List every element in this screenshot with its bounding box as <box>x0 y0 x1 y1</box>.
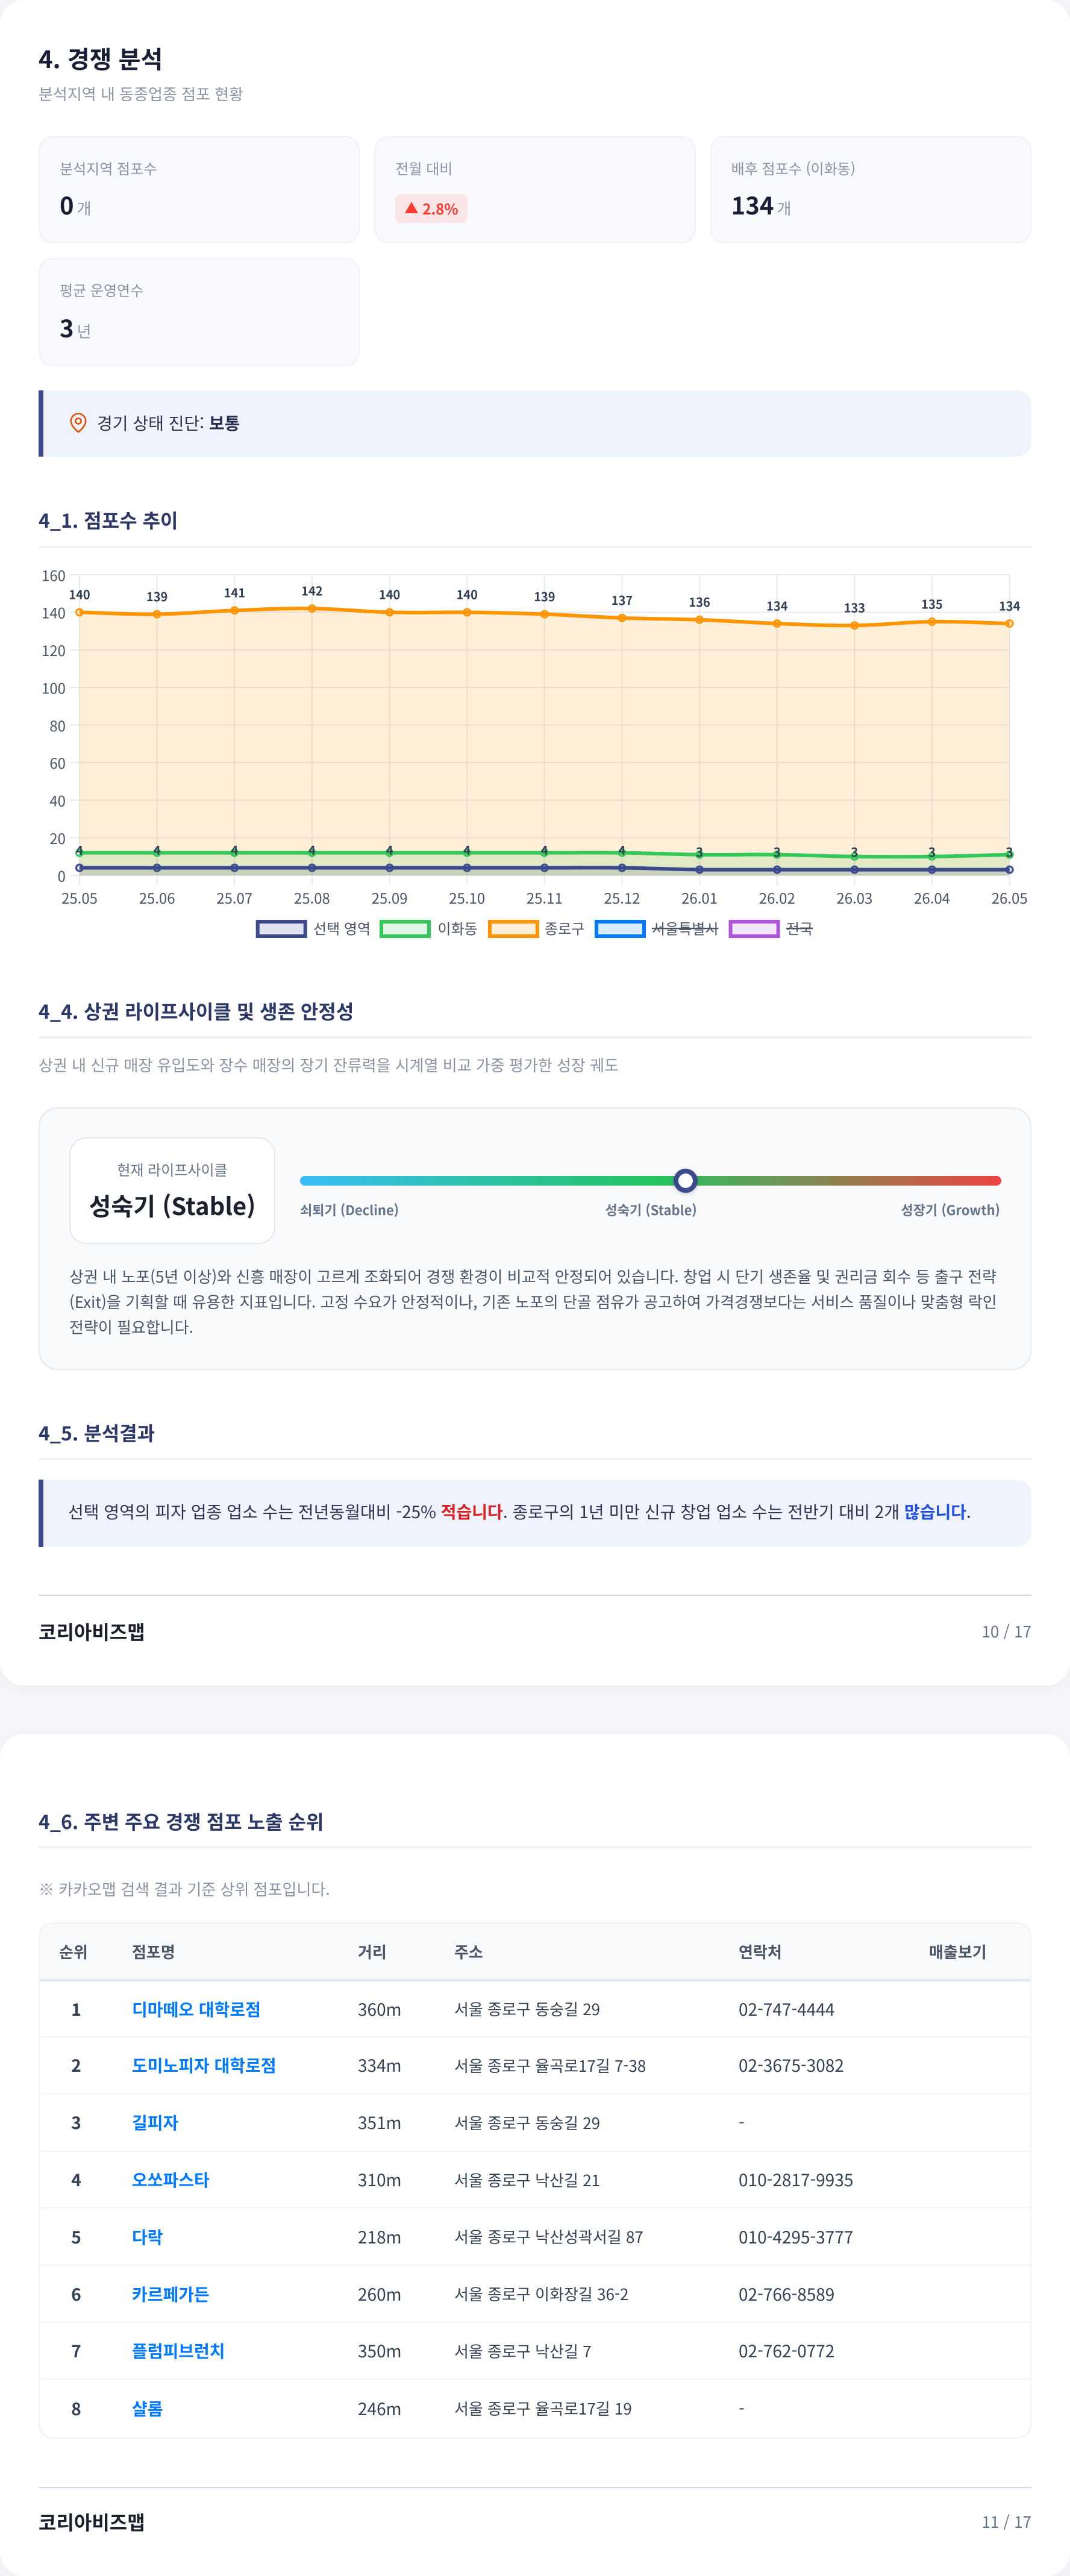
callout: 경기 상태 진단 <box>39 390 1031 457</box>
data labels: 종로구: 134 <box>766 596 788 614</box>
heading: 4_4: 4_4. 상권 라이프사이클 및 생존 안정성 <box>39 997 354 1025</box>
x axis labels: 26.05 <box>992 887 1028 908</box>
line chart: 점포수 추이 <box>42 564 1028 939</box>
table: competitors: 351m <box>358 2110 402 2134</box>
icon: map pin <box>70 413 87 433</box>
stat card: 배후 점포수: 134개 <box>731 187 791 222</box>
legend: 서울특별시 <box>652 917 718 939</box>
y axis labels: 60 <box>49 752 66 773</box>
table: competitors: - <box>739 2396 745 2421</box>
data labels: 종로구: 141 <box>224 584 245 601</box>
page number: 11 / 17 <box>982 2510 1031 2533</box>
footer brand: 코리아비즈맵 <box>39 1618 145 1645</box>
table: competitors: 다락 <box>132 2224 163 2248</box>
table: competitors: 길피자 <box>132 2110 178 2134</box>
data labels: 선택 영역: 4 <box>541 841 548 858</box>
y axis labels: 140 <box>42 602 66 623</box>
callout: analysis result: 선택 영역의 피자 업종 업소 수는 전년동월대비 -25% 적습니다. 종로구의 1년 미만 신규 창업 업소 수는 전반기 대비 2개 많습니다. <box>68 1499 971 1524</box>
table: competitors: 서울 종로구 낙산길 21 <box>454 2169 600 2190</box>
table: competitors: 서울 종로구 낙산길 7 <box>454 2340 592 2362</box>
heading: 4_5: 4_5. 분석결과 <box>39 1419 155 1446</box>
table: competitors: 3 <box>71 2110 81 2134</box>
data labels: 종로구: 139 <box>534 587 555 605</box>
legend <box>258 917 813 939</box>
table: competitors: 서울 종로구 율곡로17길 7-38 <box>454 2054 646 2076</box>
table: competitors: 서울 종로구 동숭길 29 <box>454 1998 600 2020</box>
description: 4_4: 상권 내 신규 매장 유입도와 장수 매장의 장기 잔류력을 시계열 비교 가중 평가한 성장 궤도 <box>39 1054 619 1076</box>
table: competitors: 360m <box>358 1996 402 2021</box>
table: competitors: 점포명 <box>132 1940 175 1963</box>
data labels: 종로구: 140 <box>379 586 400 603</box>
x axis labels: 25.07 <box>216 887 252 908</box>
table: competitors: 218m <box>358 2224 402 2248</box>
description paragraph <box>69 1265 997 1338</box>
table: competitors: 6 <box>71 2282 81 2306</box>
data labels: 선택 영역: 4 <box>463 841 471 858</box>
callout: analysis result <box>39 1480 1031 1547</box>
scale label: stable: 성숙기 (Stable) <box>605 1200 697 1219</box>
table: competitors: 서울 종로구 이화장길 36-2 <box>454 2283 628 2305</box>
data labels: 종로구: 142 <box>301 581 323 599</box>
x axis labels: 25.06 <box>139 887 175 908</box>
table: competitors: 2 <box>71 2053 81 2077</box>
legend: 종로구 <box>545 917 584 939</box>
table: competitors: 플럼피브런치 <box>132 2339 225 2363</box>
y axis labels: 160 <box>42 564 66 585</box>
current stage card <box>69 1137 275 1244</box>
diagnosis text: 경기 상태 진단: 보통 <box>97 411 240 435</box>
table: competitors: 350m <box>358 2339 402 2363</box>
x axis labels <box>61 887 1028 908</box>
data labels: 선택 영역: 4 <box>386 841 393 858</box>
x axis labels: 26.02 <box>759 887 795 908</box>
heading: 4_1: 4_1. 점포수 추이 <box>39 506 178 534</box>
stat card: 평균 운영연수: 평균 운영연수 <box>60 279 143 300</box>
y axis labels: 40 <box>49 790 66 811</box>
table: competitors: 4 <box>71 2168 81 2192</box>
legend: 선택 영역 <box>313 917 371 939</box>
table: competitors: 02-762-0772 <box>739 2339 834 2363</box>
series: 이화동 <box>76 849 1013 875</box>
legend: 전국 <box>786 917 813 939</box>
x axis labels: 25.12 <box>604 887 640 908</box>
table: competitors: 순위 <box>59 1940 88 1963</box>
subtitle: 분석지역 내 동종업종 점포 현황 <box>39 83 243 105</box>
note: ※ 카카오맵 검색 결과 기준 상위 점포입니다. <box>39 1878 330 1900</box>
x axis labels: 26.03 <box>836 887 872 908</box>
table: competitors: 서울 종로구 낙산성곽서길 87 <box>454 2225 643 2248</box>
data labels: 종로구: 135 <box>921 595 943 612</box>
data labels: 선택 영역 <box>76 841 1013 860</box>
stat card: 평균 운영연수: 3년 <box>60 310 92 345</box>
data labels: 선택 영역: 4 <box>231 841 238 858</box>
table: competitors: 오쏘파스타 <box>132 2168 210 2192</box>
series: 선택 영역 <box>76 864 1013 875</box>
data labels: 종로구 <box>69 581 1021 616</box>
table: competitors: 02-766-8589 <box>739 2282 834 2306</box>
gradient track <box>300 1176 1001 1186</box>
data labels: 선택 영역: 4 <box>619 841 626 858</box>
data labels: 종로구: 140 <box>456 586 478 603</box>
description paragraph: (Exit)을 기획할 때 유용한 지표입니다. 고정 수요가 안정적이나, 기존 노포의 단골 점유가 공고하여 가격경쟁보다는 서비스 품질이나 맞춤형 락인 <box>69 1290 997 1313</box>
scale label: growth: 성장기 (Growth) <box>901 1200 1000 1219</box>
scale label: decline: 쇠퇴기 (Decline) <box>300 1200 399 1219</box>
table: competitors: 서울 종로구 율곡로17길 19 <box>454 2397 632 2419</box>
title: 4. 경쟁 분석 <box>39 40 163 75</box>
description paragraph: 상권 내 노포(5년 이상)와 신흥 매장이 고르게 조화되어 경쟁 환경이 비교적 안정되어 있습니다. 창업 시 단기 생존율 및 권리금 회수 등 출구 전략 <box>69 1265 996 1287</box>
table: competitors: 서울 종로구 동숭길 29 <box>454 2111 600 2134</box>
data labels: 선택 영역: 4 <box>308 841 316 858</box>
current stage card: 현재 라이프사이클 <box>117 1158 228 1180</box>
description paragraph: 전략이 필요합니다. <box>69 1316 193 1338</box>
table: competitors: 도미노피자 대학로점 <box>132 2053 277 2077</box>
table: competitors: 8 <box>71 2396 81 2421</box>
table: competitors: 연락처 <box>739 1940 782 1963</box>
table: competitors: 샬롬 <box>132 2396 163 2421</box>
data labels: 선택 영역: 3 <box>928 843 936 860</box>
data labels: 종로구: 136 <box>689 593 710 610</box>
panel: page 11 <box>0 1734 1070 2576</box>
stat card: 배후 점포수: 배후 점포수 (이화동) <box>731 157 856 178</box>
table: competitors: 5 <box>71 2224 81 2248</box>
x axis labels: 25.08 <box>294 887 330 908</box>
table: competitors: 주소 <box>454 1940 483 1963</box>
current stage card: 성숙기 (Stable) <box>89 1187 255 1222</box>
heading: 4_6: 4_6. 주변 주요 경쟁 점포 노출 순위 <box>39 1807 324 1835</box>
data labels: 선택 영역: 3 <box>774 843 781 860</box>
table: competitors: 매출보기 <box>929 1940 987 1963</box>
stat card: 분석지역 점포수: 0개 <box>60 187 92 222</box>
data labels: 종로구: 140 <box>69 586 90 603</box>
y axis labels: 120 <box>42 639 66 660</box>
table: competitors: 246m <box>358 2396 402 2421</box>
series: 종로구 <box>76 605 1013 875</box>
y axis labels: 100 <box>42 677 66 698</box>
panel: page 10 <box>0 0 1070 1686</box>
stat card: 평균 운영연수 <box>39 258 360 366</box>
y axis labels: 80 <box>49 714 66 736</box>
table: competitors: 7 <box>71 2339 81 2363</box>
data labels: 종로구: 137 <box>612 591 633 608</box>
panel: lifecycle <box>39 1107 1031 1370</box>
x axis labels: 26.01 <box>681 887 718 908</box>
table: competitors: 1 <box>71 1996 81 2021</box>
page number: 10 / 17 <box>982 1620 1031 1642</box>
table: competitors: 02-747-4444 <box>739 1996 834 2021</box>
y axis labels <box>42 564 66 886</box>
x axis labels: 25.05 <box>61 887 98 908</box>
footer brand: 코리아비즈맵 <box>39 2508 145 2536</box>
legend: 이화동 <box>437 917 478 939</box>
data labels: 선택 영역: 3 <box>696 843 703 860</box>
y axis labels: 0 <box>58 864 66 886</box>
stat card: 전월 대비 <box>374 136 696 243</box>
data labels: 종로구: 139 <box>146 587 167 605</box>
data labels: 선택 영역: 4 <box>76 841 83 858</box>
table: competitors: 010-2817-9935 <box>739 2168 853 2192</box>
table: competitors: 334m <box>358 2053 402 2077</box>
data labels: 종로구: 134 <box>999 596 1021 614</box>
badge: 2.8% up: 2.8% <box>422 198 458 219</box>
data labels: 선택 영역: 3 <box>1006 843 1013 860</box>
table: competitors: 디마떼오 대학로점 <box>132 1996 261 2021</box>
data labels: 종로구: 133 <box>844 599 865 616</box>
stat card: 전월 대비: 전월 대비 <box>395 157 452 178</box>
marker <box>674 1169 698 1193</box>
stat card: 분석지역 점포수: 분석지역 점포수 <box>60 157 157 178</box>
table: competitors: 010-4295-3777 <box>739 2224 853 2248</box>
stat card: 배후 점포수 <box>710 136 1031 243</box>
data labels: 선택 영역: 3 <box>851 843 858 860</box>
table: competitors: 카르페가든 <box>132 2282 210 2306</box>
table: competitors: 260m <box>358 2282 402 2306</box>
x axis labels: 25.10 <box>449 887 485 908</box>
y axis labels: 20 <box>49 827 66 848</box>
data labels: 선택 영역: 4 <box>154 841 161 858</box>
x axis labels: 25.09 <box>372 887 408 908</box>
x axis labels: 26.04 <box>914 887 950 908</box>
table: competitors: - <box>739 2110 745 2134</box>
table: competitors: 310m <box>358 2168 402 2192</box>
badge: 2.8% up <box>395 194 468 223</box>
stat card: 분석지역 점포수 <box>39 136 360 243</box>
table: competitors <box>39 1922 1031 2439</box>
table: competitors: 거리 <box>358 1940 387 1963</box>
x axis labels: 25.11 <box>527 887 563 908</box>
table: competitors: 02-3675-3082 <box>739 2053 844 2077</box>
